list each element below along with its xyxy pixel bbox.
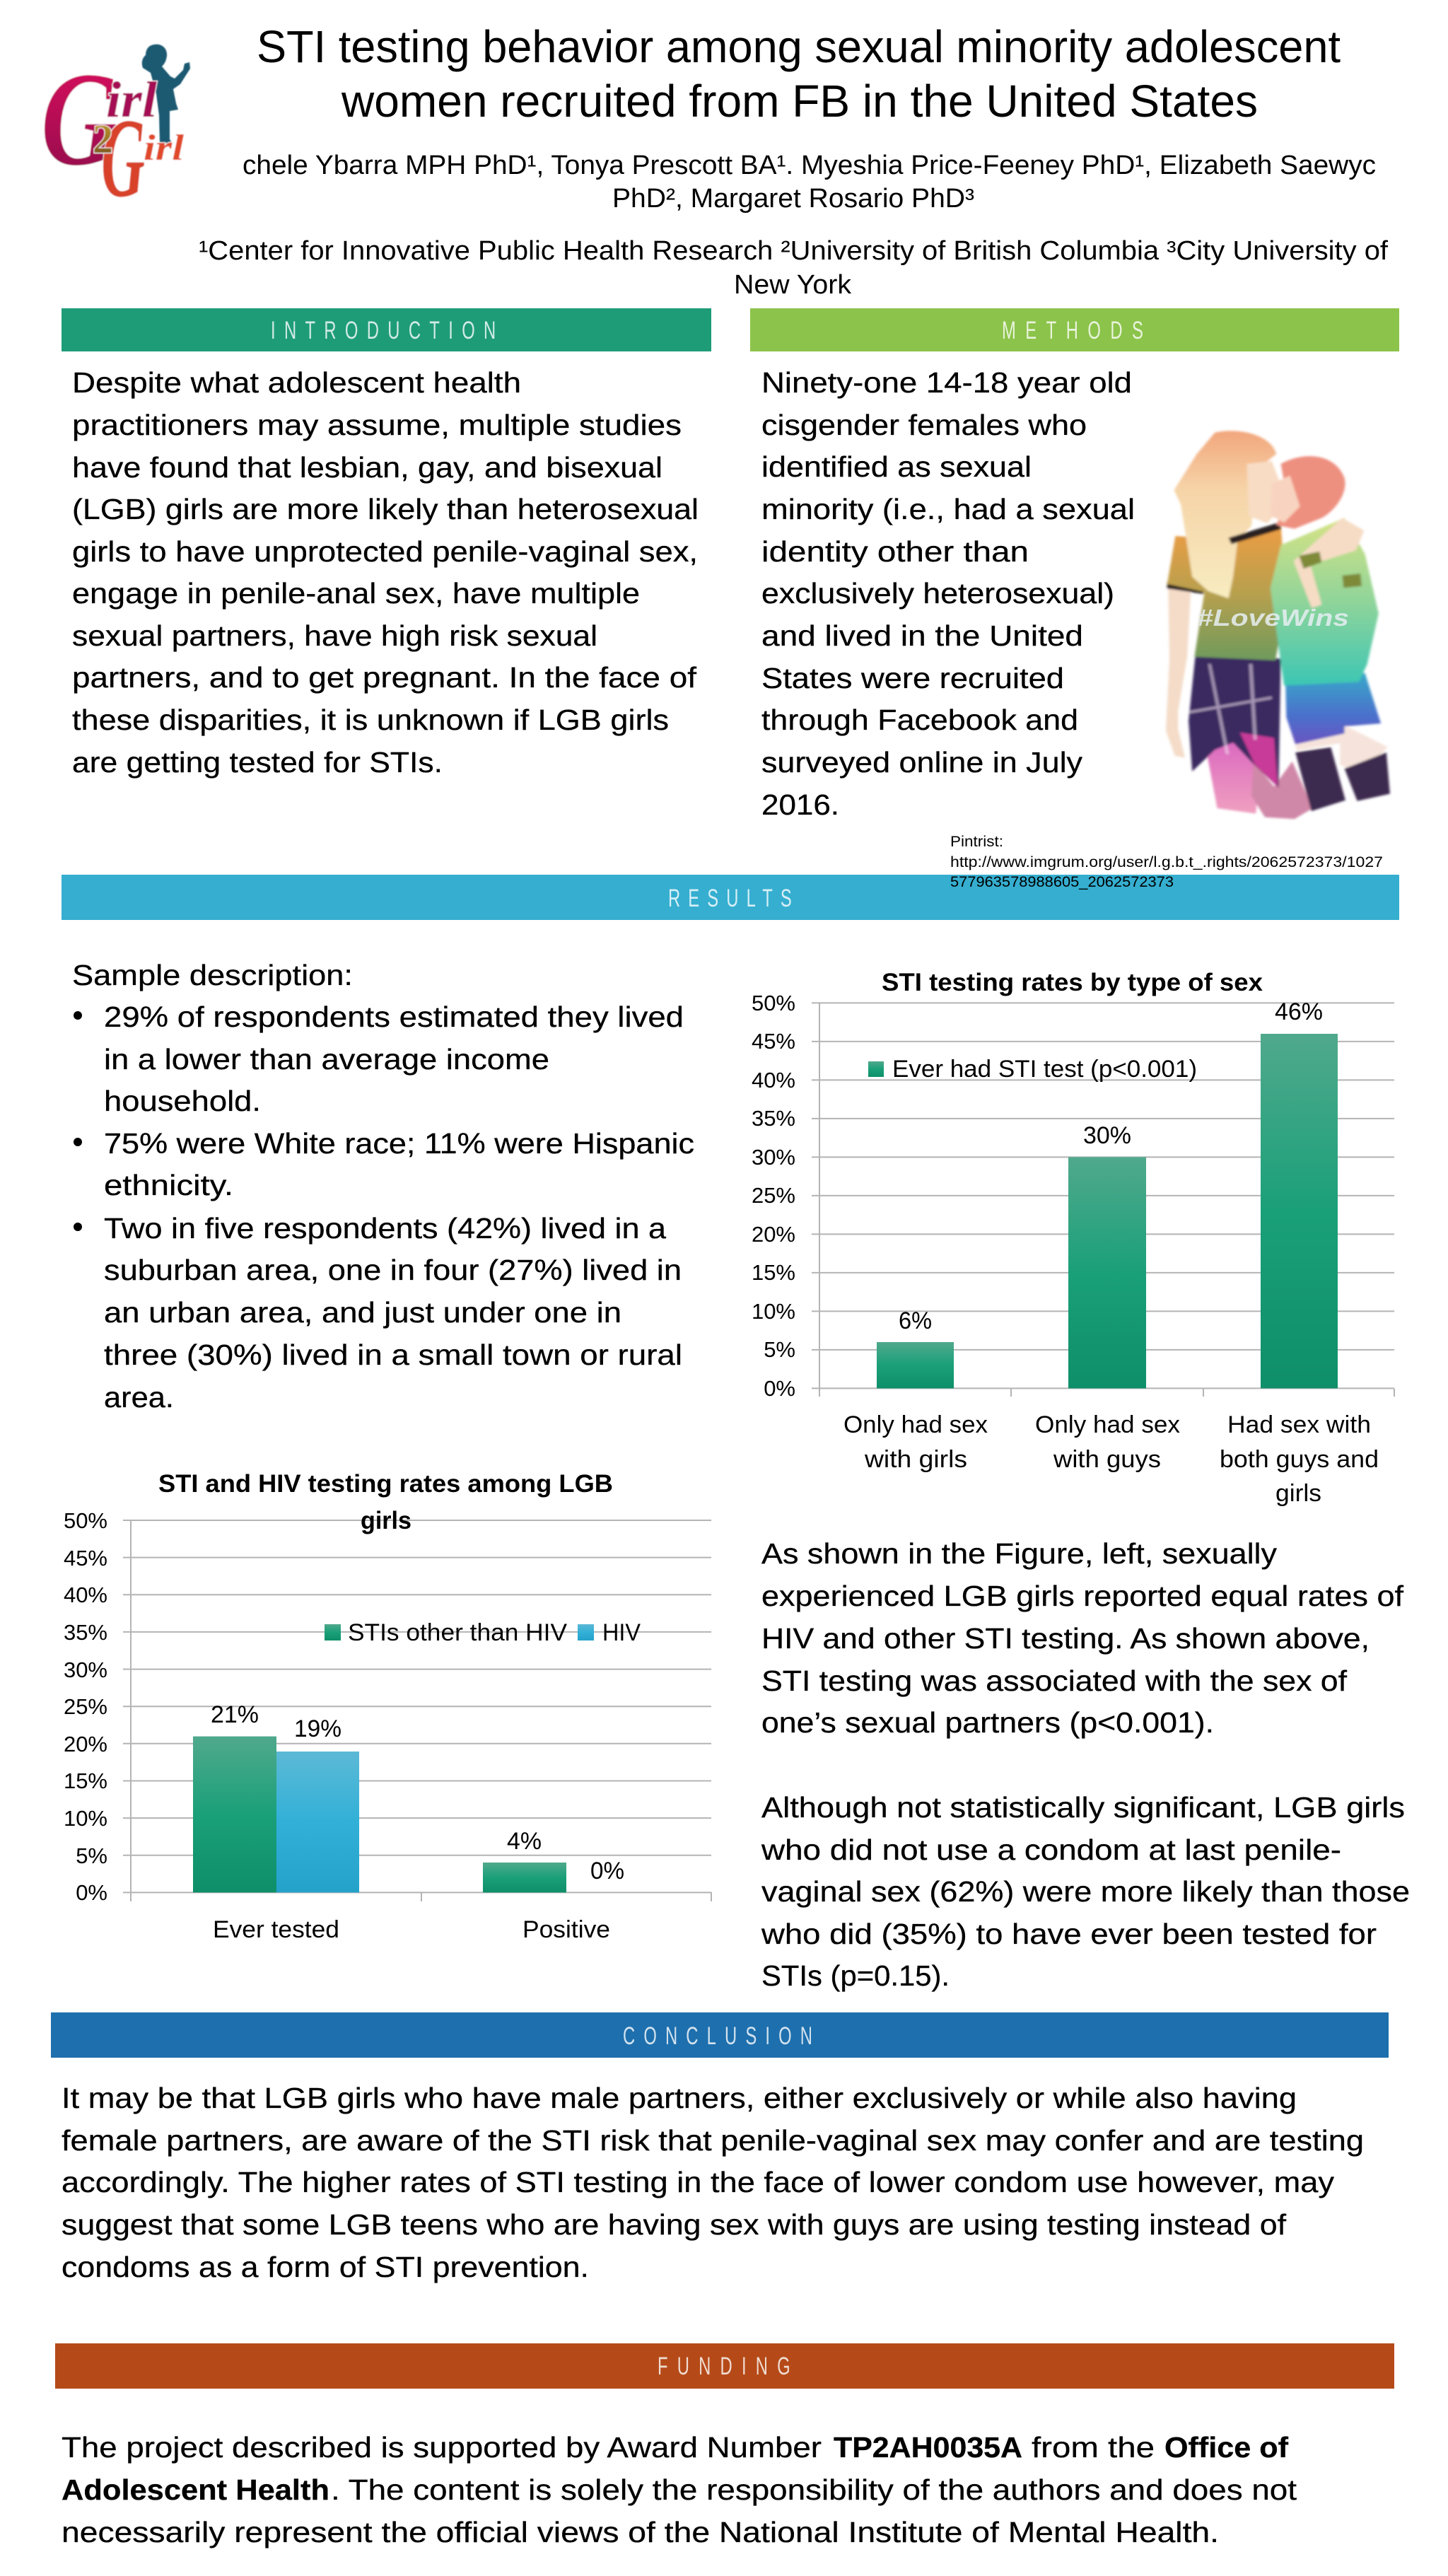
legend — [325, 1619, 641, 1646]
text block: introduction: engage in penile-anal sex, have multiple — [72, 577, 640, 610]
heading bar: conclusion: CONCLUSION — [623, 2023, 812, 2050]
authors: PhD², Margaret Rosario PhD³ — [612, 184, 974, 214]
bars — [877, 1034, 1338, 1388]
y axis labels: 25% — [64, 1694, 107, 1719]
affiliations: New York — [734, 270, 852, 300]
text block: methods: minority (i.e., had a sexual — [761, 493, 1135, 525]
data labels: 30% — [1083, 1122, 1131, 1149]
text block: funding: from the — [1032, 2431, 1155, 2464]
panel: conclusion — [51, 2012, 1389, 2283]
category labels: girls — [1275, 1480, 1321, 1507]
category labels: Had sex with — [1227, 1411, 1371, 1438]
y axis labels: 45% — [64, 1546, 107, 1570]
data labels: 46% — [1275, 998, 1323, 1025]
image credit: http://www.imgrum.org/user/l.g.b.t_.rights/2062572373/1027 — [950, 854, 1383, 870]
text block: results discussion: STI testing was associated with the sex of — [761, 1665, 1348, 1697]
text block: methods: surveyed online in July — [761, 746, 1083, 779]
text block: conclusion: It may be that LGB girls who have male partners, either exclusively or while also having — [62, 2082, 1297, 2114]
y axis labels: 0% — [764, 1376, 795, 1401]
y axis labels: 5% — [764, 1337, 795, 1362]
text block: sample description: ethnicity. — [104, 1169, 233, 1201]
chart title: STI testing rates by type of sex — [882, 969, 1263, 996]
y axis labels — [752, 991, 795, 1401]
text block: sample description: in a lower than average income — [104, 1043, 549, 1076]
title — [257, 21, 1341, 127]
text block: methods: Ninety-one 14-18 year old — [761, 366, 1132, 399]
text block: funding: The project described is supported by Award Number — [62, 2431, 822, 2464]
logo word: irl (orange): irl — [144, 128, 185, 168]
text block: results discussion: vaginal sex (62%) were more likely than those — [761, 1875, 1410, 1908]
text block: results discussion: who did not use a condom at last penile- — [761, 1834, 1341, 1866]
category labels: both guys and — [1220, 1446, 1379, 1473]
image credit: Pintrist: — [950, 834, 1003, 850]
heading bar: results: RESULTS — [668, 885, 792, 912]
text block: results discussion: Although not statistically significant, LGB girls — [761, 1791, 1405, 1824]
category labels — [843, 1411, 1379, 1507]
y axis labels: 35% — [64, 1620, 107, 1645]
text block: results discussion — [761, 1537, 1410, 1992]
logo word: irl (pink): irl — [106, 71, 157, 128]
text block: introduction: Despite what adolescent health — [72, 366, 521, 399]
text block: sample description: three (30%) lived in a small town or rural — [104, 1339, 682, 1371]
text block: funding: Adolescent Health — [62, 2473, 329, 2506]
image credit — [950, 834, 1383, 890]
category labels: with guys — [1053, 1446, 1161, 1473]
authors: chele Ybarra MPH PhD¹, Tonya Prescott BA¹. Myeshia Price-Feeney PhD¹, Elizabeth Saewyc — [243, 151, 1376, 180]
chart: STI and HIV testing rates among LGB girls — [64, 1470, 711, 1943]
text block: introduction: practitioners may assume, multiple studies — [72, 409, 682, 441]
y axis labels: 5% — [76, 1843, 107, 1868]
y axis labels: 0% — [76, 1880, 107, 1905]
chart title: STI and HIV testing rates among LGB — [158, 1470, 613, 1498]
text block: introduction: sexual partners, have high risk sexual — [72, 619, 597, 652]
authors — [243, 151, 1376, 214]
data labels: 21% — [211, 1701, 259, 1728]
y axis labels: 25% — [752, 1183, 795, 1208]
y axis labels: 30% — [752, 1145, 795, 1170]
category labels: Positive — [522, 1916, 610, 1943]
heading bar: results — [62, 875, 1399, 920]
text block: funding: . The content is solely the responsibility of the authors and does not — [331, 2473, 1297, 2506]
data labels — [211, 1701, 624, 1884]
text block: results discussion: experienced LGB girls reported equal rates of — [761, 1580, 1404, 1612]
illustration: two girls kissing, #LoveWins — [1166, 431, 1390, 819]
y axis labels: 45% — [752, 1029, 795, 1054]
panel: introduction — [62, 308, 711, 779]
category labels: Ever tested — [213, 1916, 339, 1943]
text block: methods: States were recruited — [761, 662, 1064, 694]
data labels: 0% — [590, 1858, 624, 1884]
icon: silhouette of girl with phone — [142, 45, 190, 144]
legend: Ever had STI test (p<0.001) — [892, 1056, 1197, 1083]
text block: sample description: suburban area, one in four (27%) lived in — [104, 1254, 682, 1286]
y axis labels: 20% — [64, 1732, 107, 1756]
bars — [193, 1737, 566, 1892]
text block: sample description: Sample description: — [72, 959, 353, 991]
text block: methods: identified as sexual — [761, 450, 1032, 483]
heading bar: funding — [55, 2343, 1394, 2389]
heading bar: introduction — [62, 308, 711, 351]
text block: funding: Office of — [1164, 2431, 1288, 2464]
text block: conclusion: condoms as a form of STI prevention. — [62, 2251, 589, 2283]
heading bar: funding: FUNDING — [658, 2353, 790, 2380]
text block: sample description: 29% of respondents estimated they lived — [104, 1001, 684, 1033]
category labels: Only had sex — [1035, 1411, 1180, 1438]
logo word: Girl (orange): G — [101, 95, 145, 221]
text block: results discussion: who did (35%) to have ever been tested for — [761, 1918, 1377, 1950]
text block: introduction: (LGB) girls are more likely than heterosexual — [72, 493, 699, 525]
y axis labels: 10% — [64, 1806, 107, 1831]
text block: methods — [761, 366, 1135, 821]
chart title: girls — [361, 1507, 411, 1534]
text block: sample description: Two in five respondents (42%) lived in a — [104, 1212, 666, 1245]
image credit: 577963578988605_2062572373 — [950, 874, 1174, 890]
text block: methods: 2016. — [761, 788, 839, 821]
heading bar: introduction: INTRODUCTION — [271, 317, 496, 344]
category labels: Only had sex — [843, 1411, 988, 1438]
text block: results discussion: As shown in the Figure, left, sexually — [761, 1537, 1278, 1570]
y axis labels: 15% — [752, 1260, 795, 1285]
title: STI testing behavior among sexual minority adolescent — [257, 21, 1341, 72]
heading bar: conclusion — [51, 2012, 1389, 2058]
y axis labels: 15% — [64, 1768, 107, 1793]
text block: conclusion — [62, 2082, 1364, 2283]
heading bar: methods — [750, 308, 1399, 351]
y axis labels: 50% — [752, 991, 795, 1015]
text block: conclusion: suggest that some LGB teens who are having sex with guys are using testing instead of — [62, 2208, 1287, 2241]
text block: funding — [62, 2431, 1297, 2548]
y axis labels: 40% — [64, 1583, 107, 1607]
text block: introduction — [72, 366, 699, 779]
text block: methods: and lived in the United — [761, 619, 1083, 652]
text block: methods: cisgender females who — [761, 409, 1087, 441]
heading bar: methods: METHODS — [1002, 317, 1143, 344]
title: women recruited from FB in the United States — [341, 76, 1258, 127]
y axis labels — [64, 1508, 107, 1905]
text block: methods: through Facebook and — [761, 704, 1078, 736]
affiliations: ¹Center for Innovative Public Health Research ²University of British Columbia ³City University of — [199, 236, 1388, 266]
text block: introduction: these disparities, it is unknown if LGB girls — [72, 704, 669, 736]
y axis labels: 10% — [752, 1299, 795, 1324]
logo numeral: 2: 2 — [93, 116, 113, 162]
category labels — [213, 1916, 610, 1943]
legend: STIs other than HIV — [348, 1619, 567, 1646]
text block: results discussion: one’s sexual partners (p<0.001). — [761, 1706, 1214, 1739]
panel: methods — [750, 308, 1399, 821]
text block: sample description: area. — [104, 1381, 174, 1414]
text block: conclusion: female partners, are aware of the STI risk that penile-vaginal sex may confer and are testing — [62, 2124, 1364, 2157]
text block: funding: necessarily represent the official views of the National Institute of Mental Health. — [62, 2516, 1219, 2548]
text block: sample description: an urban area, and just under one in — [104, 1296, 621, 1329]
text block: conclusion: accordingly. The higher rates of STI testing in the face of lower condom use however, may — [62, 2166, 1335, 2198]
affiliations — [199, 236, 1388, 300]
text block: results discussion: HIV and other STI testing. As shown above, — [761, 1622, 1370, 1655]
category labels: with girls — [864, 1446, 967, 1473]
data labels: 4% — [507, 1828, 542, 1855]
y axis labels: 40% — [752, 1068, 795, 1092]
text block: introduction: girls to have unprotected penile-vaginal sex, — [72, 535, 698, 568]
text block: sample description: household. — [104, 1085, 261, 1117]
y axis labels: 50% — [64, 1508, 107, 1533]
text block: sample description — [72, 959, 694, 1414]
chart: STI testing rates by type of sex — [752, 969, 1394, 1507]
text block: funding: TP2AH0035A — [834, 2431, 1022, 2464]
chart title — [158, 1470, 613, 1534]
panel: funding — [55, 2343, 1394, 2548]
text block: sample description: 75% were White race; 11% were Hispanic — [104, 1127, 694, 1160]
y axis labels: 20% — [752, 1222, 795, 1247]
text block: introduction: partners, and to get pregnant. In the face of — [72, 661, 697, 694]
text block: results discussion: STIs (p=0.15). — [761, 1959, 950, 1992]
legend: HIV — [602, 1619, 641, 1646]
text block: methods: identity other than — [761, 535, 1029, 568]
data labels — [899, 998, 1323, 1334]
data labels: 6% — [899, 1307, 932, 1334]
text block: introduction: are getting tested for STIs. — [72, 746, 443, 779]
data labels: 19% — [294, 1715, 341, 1742]
image label: #LoveWins: #LoveWins — [1197, 605, 1349, 631]
text block: introduction: have found that lesbian, gay, and bisexual — [72, 451, 662, 484]
y axis labels: 35% — [752, 1106, 795, 1131]
logo word: Girl (pink): G — [41, 45, 117, 194]
y axis labels: 30% — [64, 1657, 107, 1682]
logo: Girl 2 Girl — [41, 45, 190, 221]
text block: methods: exclusively heterosexual) — [761, 577, 1114, 610]
